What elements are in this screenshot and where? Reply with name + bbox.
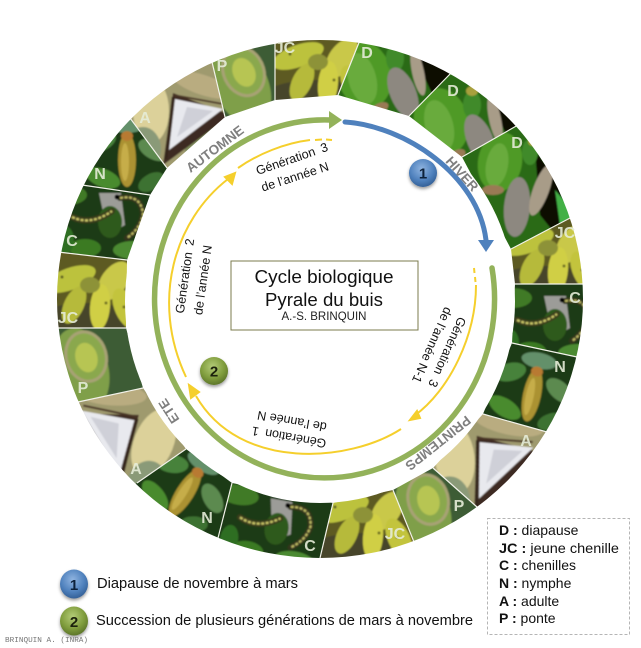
inner white disc bbox=[125, 100, 515, 503]
photo: ponte (left) bbox=[58, 328, 143, 402]
photo: nymphe (upper left) bbox=[84, 120, 167, 195]
photo: diapause 2 bbox=[409, 74, 516, 157]
legend entry 1 bbox=[60, 570, 298, 598]
badge 1 in ring: 1 bbox=[419, 166, 427, 182]
central title box: Cycle biologique bbox=[254, 267, 394, 287]
key box: stage abbreviations: N : nymphe bbox=[499, 575, 572, 591]
photo: nymphe (bottom left) bbox=[136, 449, 232, 538]
photo: chenilles (bottom) bbox=[218, 483, 333, 558]
photo: diapause 1 bbox=[338, 42, 450, 116]
stage letters on ring: C bbox=[66, 233, 78, 250]
generation label: 3 de l'année N: Génération 3 bbox=[254, 140, 330, 178]
yellow arrow: generation 2 bbox=[169, 173, 235, 377]
yellow arrow: generation 3 N-1 bbox=[410, 268, 476, 420]
photo: jeune chenille (left) bbox=[57, 253, 127, 328]
legend entry 1: Diapause de novembre à mars bbox=[97, 576, 298, 592]
key box: stage abbreviations bbox=[488, 518, 630, 634]
stage letters on ring: N bbox=[201, 510, 213, 527]
photo ring: life-cycle stages bbox=[57, 40, 583, 558]
badge 2 in ring: 2 bbox=[210, 364, 218, 380]
generation label: 3 de l'année N: de l’année N bbox=[259, 159, 331, 195]
legend entry 2 bbox=[60, 606, 473, 636]
generation label: 2 de l'année N: Génération 2 bbox=[173, 238, 197, 314]
photo: nymphe (right) bbox=[483, 343, 576, 432]
key box: stage abbreviations: D : diapause bbox=[499, 522, 579, 538]
credit: BRINQUIN A. (INRA) bbox=[5, 637, 88, 645]
season label: hiver: HIVER bbox=[443, 154, 482, 195]
legend entry 2: 2 bbox=[70, 614, 78, 631]
key box: stage abbreviations: P : ponte bbox=[499, 610, 556, 626]
badge 2 in ring bbox=[200, 357, 228, 385]
legend entry 1: 1 bbox=[70, 577, 78, 594]
legend entry 2: Succession de plusieurs générations de mars à novembre bbox=[96, 613, 473, 629]
stage letters on ring: A bbox=[139, 110, 151, 127]
stage letters on ring: P bbox=[454, 498, 465, 515]
generation label: 1 de l'année N: de l’année N bbox=[256, 408, 328, 434]
green arrow: generations cycle bbox=[155, 111, 495, 478]
stage letters on ring: N bbox=[554, 359, 566, 376]
stage letters on ring: P bbox=[78, 380, 89, 397]
central title box: A.-S. BRINQUIN bbox=[282, 311, 366, 323]
season label: printemps: PRINTEMPS bbox=[402, 413, 474, 473]
photo: ponte (bottom right) bbox=[393, 468, 476, 541]
season label: automne: AUTOMNE bbox=[183, 123, 247, 175]
stage letters on ring: JC bbox=[275, 40, 296, 57]
stage letters on ring: D bbox=[511, 135, 523, 152]
stage letters on ring: N bbox=[94, 166, 106, 183]
stage letters on ring: D bbox=[361, 45, 373, 62]
central title box bbox=[231, 261, 418, 330]
season label: été: ETE bbox=[156, 396, 182, 426]
photo: adulte (right) bbox=[433, 414, 546, 507]
photo: jeune chenille (top) bbox=[276, 40, 358, 100]
generation label: 3 de l'année N bbox=[254, 140, 331, 195]
generation label: 2 de l'année N bbox=[173, 238, 215, 316]
key box: stage abbreviations: C : chenilles bbox=[499, 557, 576, 573]
generation label: 3 de l'année N-1: de l’année N-1 bbox=[409, 305, 455, 385]
stage letters on ring: JC bbox=[385, 526, 406, 543]
photo: adulte (upper left) bbox=[131, 63, 225, 168]
photo: diapause 3 bbox=[462, 126, 570, 249]
stage letters on ring: A bbox=[130, 461, 142, 478]
stage letters on ring: JC bbox=[555, 225, 576, 242]
key box: stage abbreviations: A : adulte bbox=[499, 593, 559, 609]
photo: chenilles (right) bbox=[512, 284, 583, 356]
stage letters on ring: C bbox=[304, 538, 316, 555]
badge 1 in ring bbox=[409, 159, 437, 187]
stage letters on ring bbox=[58, 40, 581, 555]
photo: ponte (top left) bbox=[212, 44, 275, 117]
central title box: Pyrale du buis bbox=[265, 290, 383, 310]
generation label: 3 de l'année N-1: Génération 3 bbox=[425, 315, 469, 389]
stage letters on ring: A bbox=[520, 433, 532, 450]
stage letters on ring: P bbox=[217, 58, 228, 75]
photo: chenilles (left) bbox=[61, 186, 150, 260]
photo: adulte (left) bbox=[79, 388, 186, 484]
blue arrow: diapause bbox=[345, 122, 494, 252]
generation label: 2 de l'année N: de l’année N bbox=[191, 244, 215, 316]
yellow arrow: generation 1 bbox=[189, 385, 401, 454]
photo: jeune chenille (right) bbox=[511, 218, 582, 284]
stage letters on ring: JC bbox=[58, 310, 79, 327]
key box: stage abbreviations: JC : jeune chenille bbox=[499, 540, 619, 556]
generation label: 1 de l'année N bbox=[251, 408, 328, 450]
yellow arc: generation 3 bbox=[238, 140, 332, 168]
stage letters on ring: D bbox=[447, 83, 459, 100]
generation label: 1 de l'année N: Génération 1 bbox=[251, 424, 327, 450]
photo: jeune chenille (bottom) bbox=[320, 490, 413, 558]
stage letters on ring: C bbox=[569, 290, 581, 307]
